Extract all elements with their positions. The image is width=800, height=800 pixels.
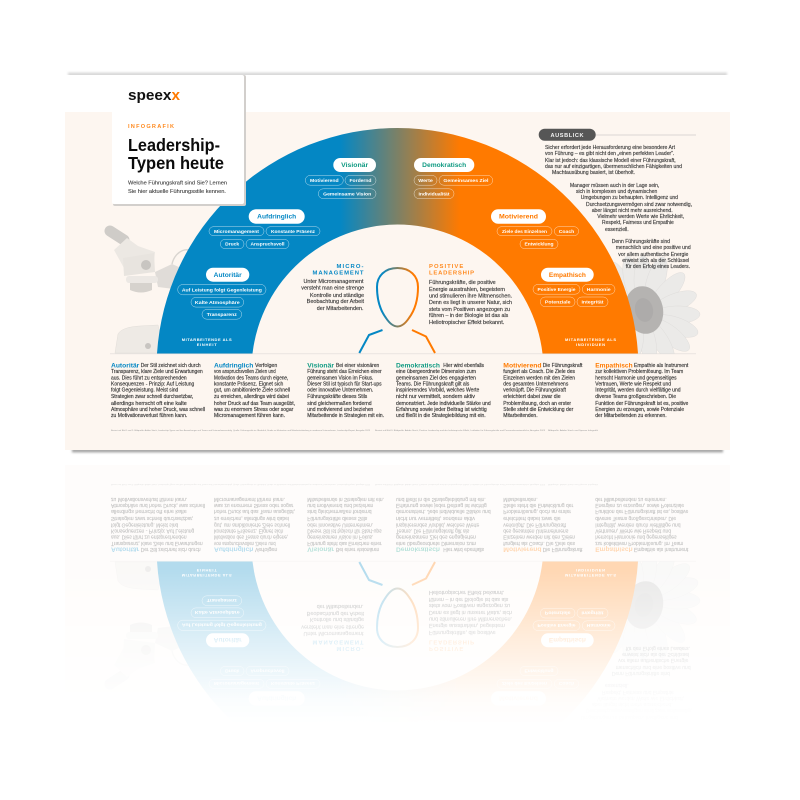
group: Visionär <box>305 158 376 199</box>
Ausblick text: Umgebungen zu behaupten. Intelligenz und <box>581 195 678 201</box>
Ausblick text: menschlich und eine positive und <box>616 245 691 251</box>
main title: Leadership- <box>128 135 220 155</box>
column: Autoritär: Strategien zwar schnell durchsetzbar, <box>111 394 193 400</box>
main title <box>128 135 224 173</box>
label: Mitarbeitende als Individuen <box>565 337 616 347</box>
title panel <box>112 75 246 206</box>
Ausblick text: essenziell. <box>605 227 629 233</box>
infographic content <box>65 115 730 450</box>
column: Visionär: Führung steht das Erreichen einer <box>307 369 382 375</box>
footnote sources: Bildquelle: Adobe Stock und Speexx Infografik <box>548 429 599 432</box>
column: Demokratisch <box>396 362 491 419</box>
Ausblick text: für den Erfolg eines Leaders. <box>626 264 690 270</box>
divider <box>110 353 696 355</box>
group: Visionär: Motivierend <box>310 178 339 183</box>
column: Autoritär: aus. Dies führt zu entsprechenden <box>111 376 187 382</box>
column: Autoritär: Konsequenzen - Prinzip: Auf Leistung <box>111 382 194 388</box>
Ausblick text: Vielmehr werden Werte wie Ehrlichkeit, <box>597 214 684 220</box>
Ausblick text: Machtausübung basiert, ist überholt. <box>552 170 635 176</box>
Ausblick text: vor allem authentische Energie <box>618 252 688 258</box>
text: Positive Leadership: Energie ausstrahlen, begeistern <box>429 287 505 293</box>
column: Aufdringlich: hoher Druck auf das Team ausgeübt, <box>214 401 295 407</box>
column: Visionär: Führungskräfte dieses Stils <box>307 394 368 400</box>
text: Micro-Management: MANAGEMENT <box>312 270 364 276</box>
column: Motivierend: erleichtert dabei zwar die <box>503 394 561 400</box>
column: Aufdringlich: konstante Präsenz. Eignet sich <box>214 382 283 388</box>
label: Mitarbeitende als Einheit: MITARBEITENDE ALS <box>182 337 232 342</box>
text: Micro-Management: der Mitarbeitenden. <box>317 306 364 312</box>
column: Demokratisch: gemeinsamen Ziel des engagierten <box>396 376 476 382</box>
group: Empathisch: Integrität <box>582 300 604 305</box>
column: Demokratisch: inspirierendes Vorbild, welches Werte <box>396 388 479 394</box>
column: Aufdringlich: Aufdringlich <box>214 362 253 369</box>
footnote sources: Basiert auf Bild 1 und 2: Bildquelle: Adobe Stock, Leadership-Typen und ihre Auswirkungen auf Teams und Unternehmenserfolg <box>111 429 233 432</box>
Ausblick heading: AUSBLICK <box>550 133 584 139</box>
footnote sources: Quelle: Führungsstile im Überblick, Studie zu Motivation und Mitarbeiterbindung in modernen Unternehmen, Leadership-Report, Ausgabe 2023 <box>233 429 371 432</box>
group: Demokratisch <box>414 158 493 199</box>
Ausblick text: Denn Führungskräfte sind <box>612 239 670 245</box>
footnote sources: Basiert auf Bild 3: Bildquelle: Adobe Stock, Positive Leadership und der heliotropische Effekt, Leitfaden für Führungskräfte und Personalverantwortliche, Ausgabe 2023 <box>375 429 546 432</box>
Ausblick text <box>545 145 692 270</box>
column: Aufdringlich: Verfolgen <box>255 363 277 369</box>
Ausblick text: Respekt, Fairness und Empathie <box>602 220 674 226</box>
card background <box>65 75 730 450</box>
main title: Typen heute <box>128 153 224 173</box>
column: Autoritär: zu Motivationsverlust führen kann. <box>111 413 187 419</box>
column: Empathisch: herrscht Harmonie und gegenseitiges <box>595 376 677 382</box>
group: Aufdringlich <box>209 209 320 249</box>
column: Empathisch: Funktion der Führungskraft ist es, positive <box>595 401 688 407</box>
footnote sources <box>111 429 599 432</box>
label: Mitarbeitende als Einheit <box>182 337 232 347</box>
column: Demokratisch: und fließt in die Strategiebildung mit ein. <box>396 413 486 419</box>
column: Empathisch: Vertrauen, Werte wie Respekt und <box>595 382 671 388</box>
text: Positive Leadership: stets vom Positiven angezogen zu <box>429 307 510 313</box>
column: Empathisch: Empathisch <box>595 362 633 369</box>
column: Empathisch: zur kollektiven Problemlösung. Im Team <box>595 369 683 375</box>
text: Positive Leadership: LEADERSHIP <box>429 270 474 276</box>
Ausblick text: sich in komplexen und dynamischen <box>576 189 657 195</box>
column: Aufdringlich: gut, um ambitionierte Ziele schnell <box>214 388 290 394</box>
column: Demokratisch: Erfahrung sowie jeder Beitrag ist wichtig <box>396 407 487 413</box>
column: Aufdringlich: zu erreichen, allerdings wird dabei <box>214 394 289 400</box>
group: Visionär: Fordernd <box>350 178 372 183</box>
column: Visionär: Visionär <box>307 362 334 369</box>
column: Motivierend: Einzelnen werden mit den Zielen <box>503 376 575 382</box>
group: Demokratisch: Werte <box>418 178 433 183</box>
label: Mitarbeitende als Individuen: INDIVIDUEN <box>576 342 605 347</box>
column: Autoritär: allerdings herrscht oft eine kalte <box>111 401 187 407</box>
subtitle: Sie hier aktuelle Führungsstile kennen. <box>128 189 226 195</box>
group: Autoritär <box>178 268 266 319</box>
column: Visionär: Dieser Stil ist typisch für Start-ups <box>307 382 382 388</box>
column: Demokratisch: demonstriert. Jede individuelle Stärke und <box>396 401 491 407</box>
text: Positive Leadership <box>429 264 512 326</box>
column: Visionär: Mitarbeitende in Strategien mit ein. <box>307 413 384 419</box>
group: Visionär: Visionär <box>341 163 369 169</box>
group: Empathisch: Empathisch <box>549 273 586 279</box>
Ausblick text: Klar ist jedoch: das klassische Modell einer Führungskraft, <box>545 158 676 164</box>
Ausblick text: das nur auf einzigartigen, übermenschlichen Fähigkeiten und <box>545 164 682 170</box>
column: Empathisch: Energien zu erzeugen, sowie Potenziale <box>595 407 684 413</box>
card shadow <box>68 72 727 452</box>
column: Autoritär: Atmosphäre und hoher Druck, was schnell <box>111 407 205 413</box>
group: Empathisch: Positive Energie <box>538 287 576 292</box>
subtitle <box>128 181 227 195</box>
illustration: sunflower <box>605 254 701 366</box>
Ausblick text: Manager müssen auch in der Lage sein, <box>570 183 659 189</box>
column: Empathisch: der Mitarbeitenden zu erkennen. <box>595 413 667 419</box>
column: Motivierend: Die Führungskraft <box>543 363 583 369</box>
group: Autoritär: Transparenz <box>207 312 238 317</box>
column: Motivierend: Stelle steht die Entwicklung der <box>503 407 574 413</box>
column: Motivierend <box>503 362 583 419</box>
text: Positive Leadership: führen – in der Biologie ist das als <box>429 313 509 319</box>
column: Empathisch: diverse Teams großgeschrieben. Die <box>595 394 676 400</box>
column: Motivierend: Mitarbeitenden. <box>503 413 538 419</box>
text: Positive Leadership: Heliotropischer Effekt bekannt. <box>429 320 504 326</box>
subtitle: Welche Führungskraft sind Sie? Lernen <box>128 181 227 187</box>
group: Motivierend: Coach <box>559 229 575 234</box>
group: Motivierend: Ziele des Einzelnen <box>502 229 547 234</box>
column: Demokratisch: eine übergeordnete Dimension zum <box>396 369 476 375</box>
column: Aufdringlich: von anspruchsvollen Zielen und <box>214 369 276 375</box>
text: Micro-Management: Unter Micromanagement <box>304 279 364 285</box>
group: Aufdringlich: Konstante Präsenz <box>271 229 316 234</box>
column: Empathisch: Empathie als Instrument <box>634 363 689 369</box>
label: Mitarbeitende als Einheit: EINHEIT <box>197 342 217 347</box>
column: Autoritär: Der Stil zeichnet sich durch <box>141 363 201 369</box>
group: Aufdringlich: Micromanagement <box>214 229 260 234</box>
column: Autoritär <box>111 362 205 419</box>
group: Autoritär: Kalte Atmosphäre <box>195 300 240 305</box>
Ausblick text: aber längst nicht mehr ausreichend. <box>592 208 673 214</box>
group: Aufdringlich: Aufdringlich <box>257 215 297 221</box>
column: Demokratisch: nicht nur vermittelt, sondern aktiv <box>396 394 475 400</box>
column: Demokratisch: Hier wird ebenfalls <box>443 363 484 369</box>
column: Visionär: sind gleichermaßen fordernd <box>307 401 372 407</box>
logo: speexx <box>128 87 181 104</box>
group: Demokratisch: Demokratisch <box>422 163 467 169</box>
label: Mitarbeitende als Individuen: MITARBEITENDE ALS <box>565 337 616 342</box>
text: Micro-Management <box>301 264 365 312</box>
group: Empathisch <box>533 268 615 307</box>
text: Micro-Management: Kontrolle und ständige <box>310 293 364 299</box>
column: Visionär: gemeinsamen Vision im Fokus. <box>307 376 373 382</box>
column: Aufdringlich <box>214 362 295 419</box>
text: Micro-Management: versteht man eine strenge <box>301 286 364 292</box>
kicker: INFOGRAFIK <box>128 124 174 130</box>
group: Empathisch: Potenziale <box>545 300 571 305</box>
group: Visionär: Gemeinsame Vision <box>323 191 372 196</box>
text: Positive Leadership: Denn es liegt in unserer Natur, sich <box>429 300 512 306</box>
column: Demokratisch: Teams. Die Führungskraft gilt als <box>396 382 470 388</box>
column: Autoritär: Transparenz, klare Ziele und Erwartungen <box>111 369 203 375</box>
text: Positive Leadership: POSITIVE <box>429 264 463 270</box>
group: Aufdringlich: Anspruchsvoll <box>250 242 284 247</box>
column: Aufdringlich: was zu enormem Stress oder sogar <box>214 407 294 413</box>
column: Motivierend: Problemlösung, doch an erster <box>503 401 571 407</box>
Ausblick text: Sicher erfordert jede Herausforderung eine besondere Art <box>545 145 676 151</box>
column: Empathisch <box>595 362 689 419</box>
arch with gradient <box>157 128 638 354</box>
column: Motivierend: fungiert als Coach. Die Ziele des <box>503 369 575 375</box>
group: Empathisch: Harmonie <box>587 287 611 292</box>
Ausblick text: Durchsetzungsvermögen sind zwar notwendig, <box>586 202 692 208</box>
group: Aufdringlich: Druck <box>225 242 240 247</box>
column: Visionär: und motivierend und beziehen <box>307 407 373 413</box>
column: Motivierend: verknüpft. Die Führungskraft <box>503 388 567 394</box>
group: Demokratisch: Gemeinsames Ziel <box>443 178 488 183</box>
column: Motivierend: Motivierend <box>503 362 542 369</box>
column: Aufdringlich: Motivation des Teams durch eigene, <box>214 376 288 382</box>
column: Visionär: oder innovative Unternehmen. <box>307 388 373 394</box>
column: Autoritär: Autoritär <box>111 362 140 369</box>
group: Motivierend: Entwicklung <box>524 242 554 247</box>
column: Visionär: Bei einer visionären <box>336 363 379 369</box>
text: Positive Leadership: Führungskräfte, die positive <box>429 280 496 286</box>
Ausblick text: von Führung – es gibt nicht den „einen perfekten Leader“. <box>545 151 674 157</box>
column: Visionär <box>307 362 384 419</box>
group: Autoritär: Autoritär <box>214 273 242 279</box>
group: Motivierend <box>491 209 579 249</box>
column: Demokratisch: Demokratisch <box>396 362 440 369</box>
text: Micro-Management: Beobachtung der Arbeit <box>307 299 365 305</box>
group: Demokratisch: Individualität <box>418 191 450 196</box>
Ausblick heading <box>539 129 696 141</box>
column: Empathisch: Integrität, werden durch vielfältige und <box>595 388 681 394</box>
text: Positive Leadership: und stimulieren ihre Mitmenschen. <box>429 294 512 300</box>
reflection of the infographic <box>110 484 698 692</box>
column: Motivierend: des gesamten Unternehmens <box>503 382 569 388</box>
column: Autoritär: folgt Gegenleistung. Meist sind <box>111 388 178 394</box>
group: Motivierend: Motivierend <box>499 215 538 221</box>
icon: person outline <box>359 268 435 353</box>
Ausblick text: erweist sich als der Schlüssel <box>622 258 689 264</box>
column: Aufdringlich: Micromanagement führen kann. <box>214 413 285 419</box>
group: Autoritär: Auf Leistung folgt Gegenleistung <box>182 287 262 292</box>
text: Micro-Management: MICRO- <box>336 264 364 270</box>
illustration: microscope <box>110 231 195 353</box>
